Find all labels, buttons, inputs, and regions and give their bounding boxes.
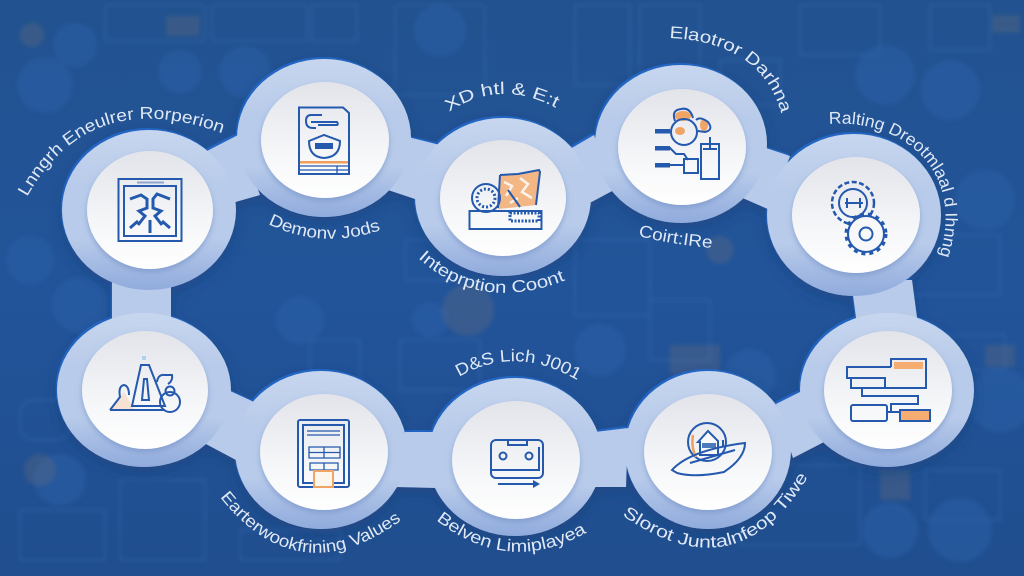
blue rim behind the chain [56, 57, 972, 534]
icon: flow diagram boxes [847, 359, 930, 421]
icon: hub with blobs and bars [655, 109, 719, 179]
white inner discs [82, 82, 952, 519]
circle shading [57, 59, 974, 536]
label: above eighth circle: D&S Lich J001 [455, 348, 580, 380]
label: below seventh circle: Earterwookfrining Values [221, 490, 400, 554]
icon: laptop with map and globe [470, 170, 542, 229]
label: below third circle: Inteprption Coont [420, 250, 566, 293]
icon: form document [298, 420, 349, 487]
icon: boat with house [672, 423, 745, 475]
label: right of fifth circle: Ralting Dreotmlaal d Ihnng [830, 112, 958, 257]
label: above third circle: XD htl & E:t [444, 82, 560, 112]
label: below second circle: Demonv Jods [270, 214, 380, 239]
icon: framed faces [118, 179, 182, 241]
icon: document with shield [299, 108, 349, 174]
icon: cassette with arrow [491, 440, 543, 488]
chain of connected circles [57, 59, 974, 536]
label: below ninth circle: Slorot Juntalnfeop Tiwe [624, 474, 806, 548]
icon: two gears [832, 182, 886, 254]
label: above fourth circle: Elaotror Darhna [670, 26, 789, 114]
label: below eighth circle: Belven Limiplayea [438, 512, 587, 554]
label: below fourth circle: Coirt:IRe [640, 226, 712, 248]
label: top left circle: Lnngrh Eneulrer Rorperion [18, 107, 224, 196]
icon: warning triangle with bushes [110, 356, 180, 412]
